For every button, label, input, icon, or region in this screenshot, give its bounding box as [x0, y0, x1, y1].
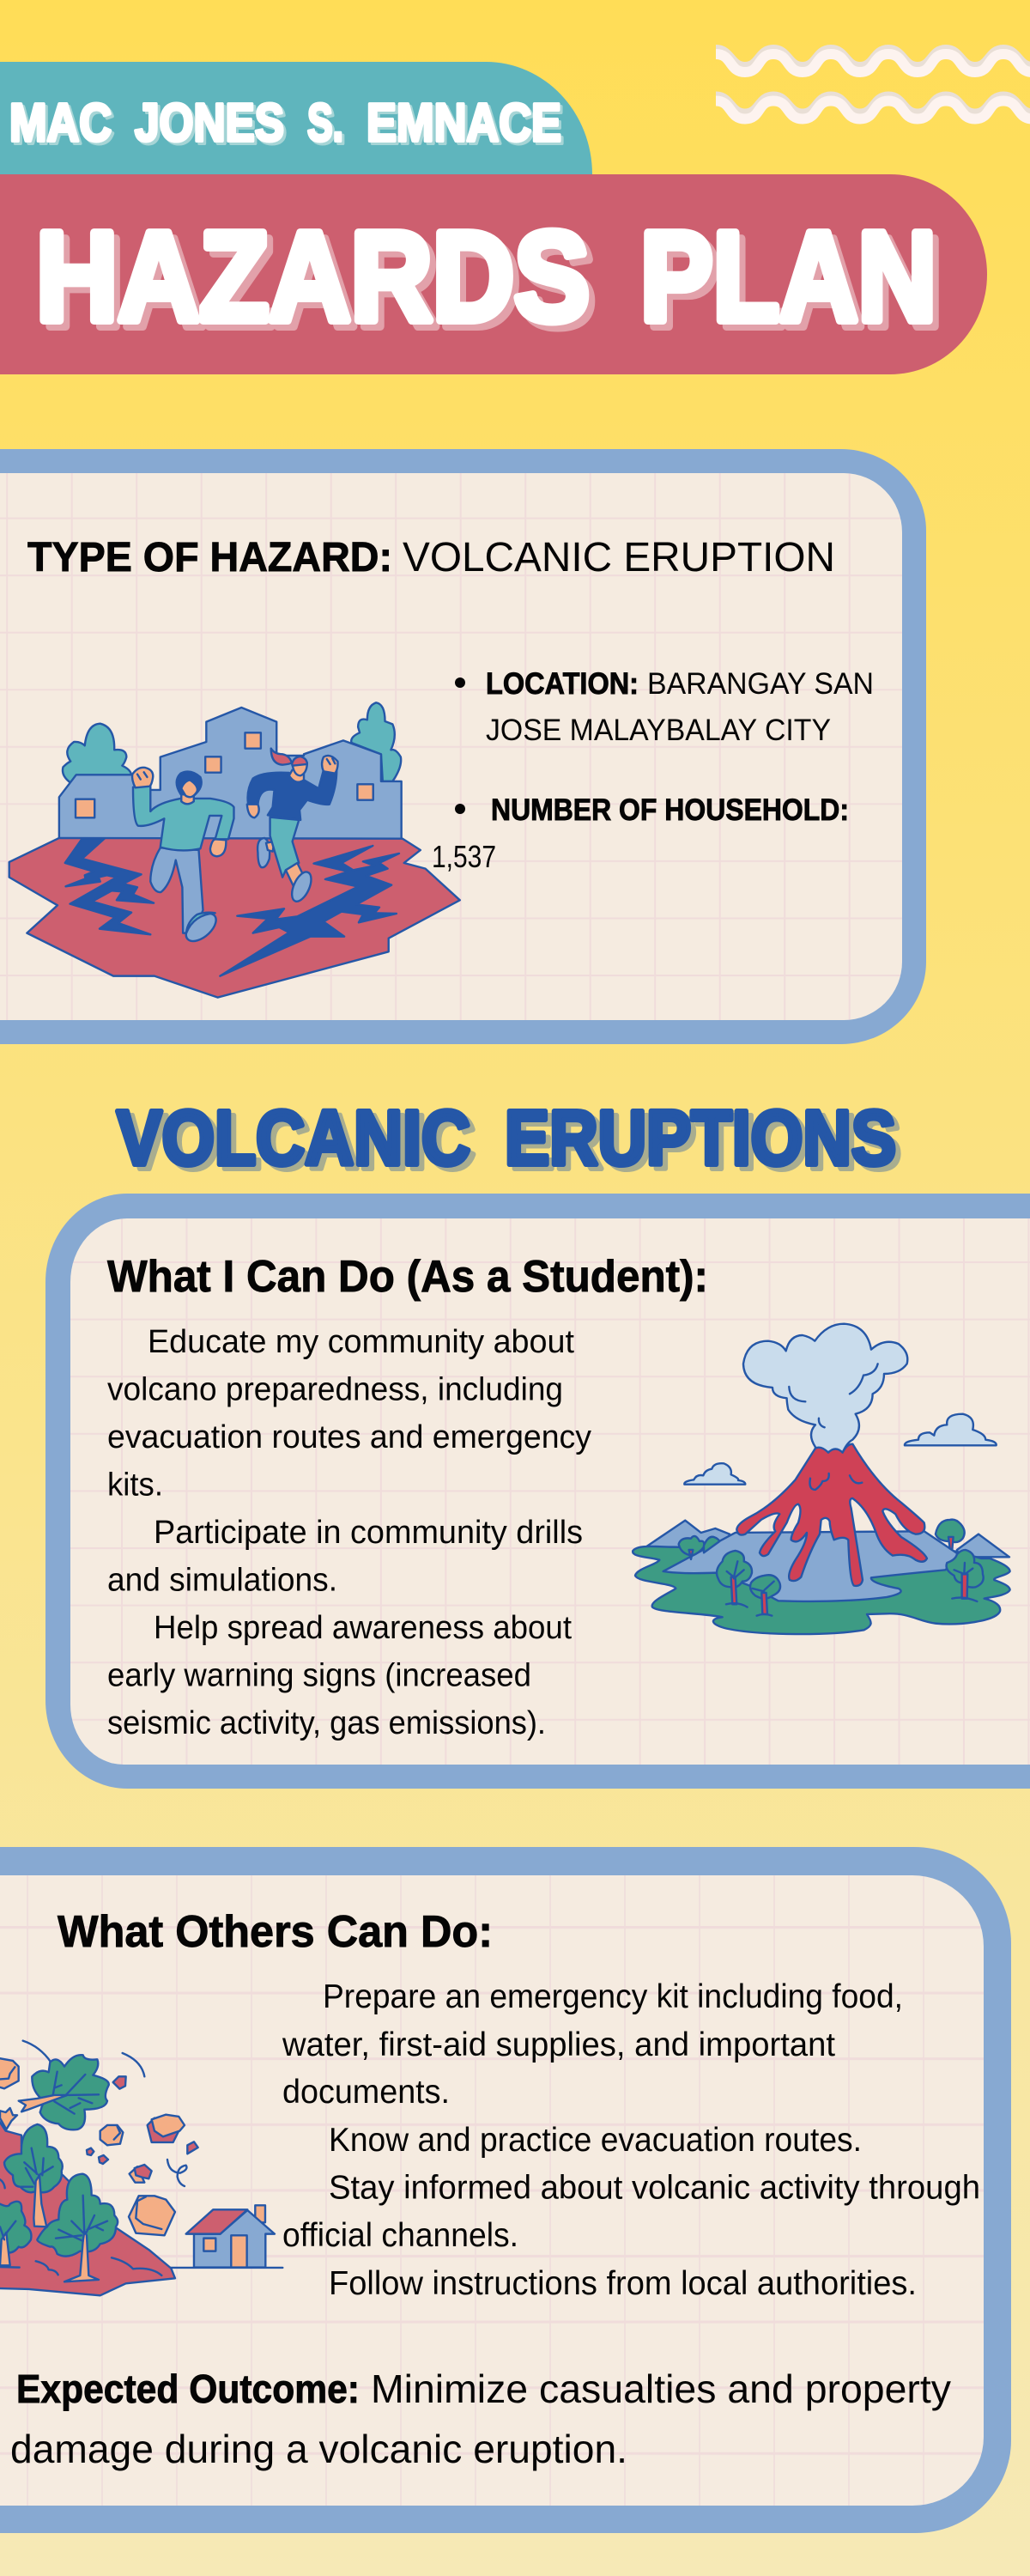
title — [36, 206, 936, 348]
red title banner — [0, 174, 987, 374]
student heading: What I Can Do (As a Student): — [107, 1252, 708, 1302]
panel: what others can do — [0, 1847, 1011, 2533]
student actions text: Help spread awareness about — [154, 1610, 572, 1646]
others actions text: official channels. — [282, 2217, 518, 2254]
teal name banner — [0, 62, 592, 177]
others actions text: Stay informed about volcanic activity through — [329, 2169, 980, 2207]
title: HAZARDS — [36, 206, 590, 348]
hazard type heading: TYPE OF HAZARD: — [27, 535, 392, 580]
author name — [9, 94, 561, 153]
location bullet: LOCATION: — [486, 667, 639, 701]
expected outcome — [10, 2366, 951, 2471]
student actions text: Educate my community about — [148, 1324, 574, 1360]
decorative waves — [716, 50, 1030, 118]
others actions text: water, first-aid supplies, and important — [282, 2026, 835, 2063]
location bullet: JOSE MALAYBALAY CITY — [486, 714, 831, 747]
others heading: What Others Can Do: — [58, 1907, 493, 1957]
illustration: falling rocks, trees and house — [0, 2041, 282, 2295]
others actions text: documents. — [282, 2074, 450, 2111]
expected outcome: Expected Outcome: — [16, 2366, 360, 2411]
woman running — [247, 749, 338, 903]
man running — [132, 768, 233, 945]
student actions text: Participate in community drills — [154, 1515, 583, 1551]
author name: EMNACE — [367, 94, 561, 153]
illustration: people running from cracked ground — [9, 702, 460, 998]
section heading: VOLCANIC — [117, 1096, 470, 1182]
illustration: erupting volcano — [633, 1324, 1010, 1634]
house — [171, 2205, 282, 2268]
trees — [679, 1520, 984, 1616]
others actions text: Prepare an emergency kit including food, — [323, 1978, 903, 2015]
student actions text: seismic activity, gas emissions). — [107, 1705, 546, 1741]
student actions text: kits. — [107, 1467, 163, 1503]
panel: what I can do — [45, 1194, 1030, 1789]
rocks — [0, 2058, 198, 2235]
household bullet — [432, 793, 849, 874]
author name: S. — [307, 94, 343, 153]
location bullet — [455, 667, 874, 747]
others actions text: Know and practice evacuation routes. — [329, 2122, 862, 2159]
student actions text — [107, 1324, 591, 1741]
hazard type heading: VOLCANIC ERUPTION — [403, 535, 835, 580]
title: PLAN — [640, 206, 936, 348]
others actions text: Follow instructions from local authorities. — [329, 2265, 917, 2302]
student actions text: evacuation routes and emergency — [107, 1419, 591, 1455]
flying tree — [19, 2041, 144, 2129]
panel: type of hazard — [0, 449, 926, 1044]
section heading: ERUPTIONS — [505, 1096, 896, 1182]
student actions text: volcano preparedness, including — [107, 1372, 563, 1408]
author name: MAC — [9, 94, 112, 153]
household bullet: NUMBER OF HOUSEHOLD: — [491, 793, 849, 827]
hazard type heading — [27, 535, 835, 580]
expected outcome: damage during a volcanic eruption. — [10, 2427, 627, 2471]
student actions text: early warning signs (increased — [107, 1657, 531, 1693]
household bullet: 1,537 — [432, 839, 496, 874]
expected outcome: Minimize casualties and property — [371, 2366, 951, 2411]
trees on hillside — [0, 2124, 118, 2281]
others actions text — [282, 1978, 980, 2302]
location bullet: BARANGAY SAN — [647, 667, 874, 701]
student actions text: and simulations. — [107, 1563, 337, 1599]
author name: JONES — [135, 94, 284, 153]
section heading — [117, 1096, 896, 1182]
